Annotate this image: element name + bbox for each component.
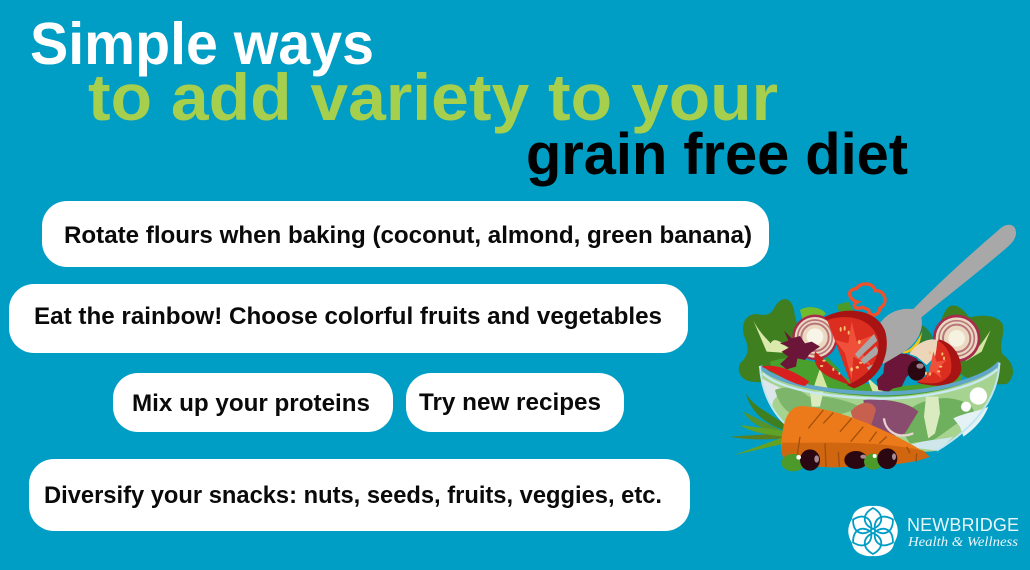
- pill: try new recipes: Try new recipes: [419, 389, 601, 416]
- logo wordmark: NEWBRIDGE: [907, 515, 1019, 535]
- pill: rotate flours: Rotate flours when baking (coconut, almond, green banana): [64, 222, 752, 249]
- onion slice right: [933, 315, 980, 362]
- lettuce back leaves: [739, 299, 1013, 396]
- tomato rim: [824, 311, 887, 388]
- onion slice left: [792, 315, 838, 360]
- title line: Simple ways: Simple ways: [30, 11, 374, 77]
- tomato: right slice: [917, 339, 961, 386]
- red pepper ring: [850, 284, 885, 315]
- logo mark: flower: [848, 506, 898, 556]
- logo: Newbridge Health & Wellness: [848, 506, 1019, 556]
- red chili: [762, 366, 809, 386]
- carrot greens: [730, 393, 785, 455]
- glass bowl: [760, 363, 999, 452]
- title line: grain free diet: grain free diet: [526, 122, 908, 187]
- pill: mix up proteins: [113, 373, 393, 432]
- pill: mix up proteins: Mix up your proteins: [132, 390, 370, 417]
- purple lettuce: [780, 331, 922, 392]
- pill: diversify snacks: [29, 459, 690, 531]
- fork: [855, 225, 1016, 371]
- pill: rotate flours: [42, 201, 769, 267]
- title: [30, 11, 908, 187]
- carrot: [781, 406, 929, 467]
- pill: diversify snacks: Diversify your snacks: nuts, seeds, fruits, veggies, etc.: [44, 482, 662, 509]
- tomato: large slice flesh: [814, 315, 881, 386]
- title line: to add variety to your: to add variety to your: [88, 60, 778, 134]
- olives: [781, 448, 897, 471]
- mushroom and olive: [908, 339, 939, 381]
- illustration: salad bowl with fork and carrot: [730, 225, 1016, 471]
- pill: eat the rainbow: Eat the rainbow! Choose colorful fruits and vegetables: [34, 303, 662, 330]
- pill: try new recipes: [406, 373, 624, 432]
- pill: eat the rainbow: [9, 284, 688, 353]
- yellow pepper behind fork: [883, 330, 922, 353]
- logo tagline: Health & Wellness: [907, 534, 1018, 549]
